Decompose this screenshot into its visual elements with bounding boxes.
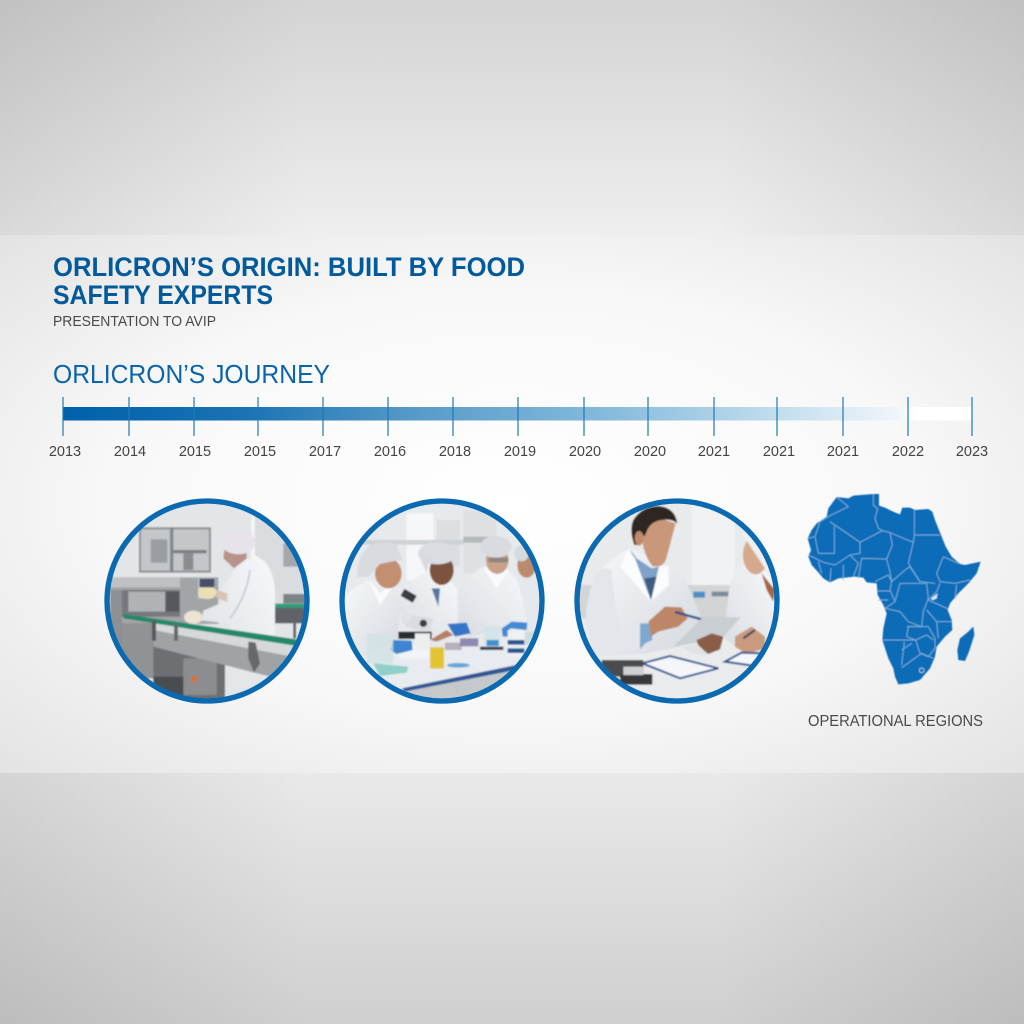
photo ring xyxy=(577,501,777,701)
photo ring xyxy=(107,501,307,701)
person xyxy=(202,556,276,636)
photo ring xyxy=(342,501,542,701)
timeline year labels: 2023 xyxy=(956,444,988,460)
timeline year labels xyxy=(49,444,988,460)
person 1 xyxy=(346,582,398,640)
country borders xyxy=(808,494,970,668)
shirt and tie area xyxy=(630,549,659,600)
timeline year labels: 2021 xyxy=(698,444,730,460)
lab device xyxy=(602,660,643,677)
Africa silhouette xyxy=(808,494,981,684)
upper frame xyxy=(140,528,210,572)
timeline year labels: 2020 xyxy=(634,444,666,460)
tablet xyxy=(673,617,741,647)
timeline year labels: 2021 xyxy=(827,444,859,460)
cuff and hand xyxy=(640,623,652,649)
bench xyxy=(377,637,530,690)
timeline ticks xyxy=(63,397,972,436)
machine xyxy=(110,577,218,624)
photo: packaging line worker xyxy=(103,497,313,707)
timeline year labels: 2020 xyxy=(569,444,601,460)
person 3 xyxy=(458,567,527,637)
title: ORLICRON’S ORIGIN: BUILT BY FOOD xyxy=(53,252,525,282)
map: Africa operational regions xyxy=(808,494,981,684)
right person xyxy=(724,570,773,646)
man coat xyxy=(605,552,700,653)
person far right xyxy=(517,568,543,640)
clipboard xyxy=(642,656,718,678)
gloves xyxy=(390,640,413,654)
table xyxy=(595,643,778,710)
background: bottom band xyxy=(0,773,1024,1024)
section heading: journey: ORLICRON’S JOURNEY xyxy=(53,359,330,389)
microscope xyxy=(399,646,429,658)
title xyxy=(53,252,525,310)
glassware xyxy=(367,633,393,663)
timeline xyxy=(49,397,988,460)
timeline year labels: 2015 xyxy=(179,444,211,460)
person 2 xyxy=(402,576,457,624)
timeline year labels: 2016 xyxy=(374,444,406,460)
lake and Lesotho xyxy=(931,593,938,600)
head xyxy=(642,517,676,567)
background: top band xyxy=(0,0,1024,235)
timeline bar xyxy=(63,407,972,420)
photo: lab technicians xyxy=(337,497,550,710)
photo: scientists with tablet xyxy=(572,497,785,710)
timeline year labels: 2019 xyxy=(504,444,536,460)
timeline year labels: 2018 xyxy=(439,444,471,460)
timeline year labels: 2013 xyxy=(49,444,81,460)
title: SAFETY EXPERTS xyxy=(53,280,273,310)
timeline year labels: 2017 xyxy=(309,444,341,460)
timeline year labels: 2014 xyxy=(114,444,146,460)
timeline year labels: 2021 xyxy=(763,444,795,460)
panel: main content band xyxy=(0,235,1024,773)
Madagascar xyxy=(957,627,974,661)
map label: OPERATIONAL REGIONS xyxy=(808,713,983,730)
subtitle: PRESENTATION TO AVIP xyxy=(53,313,216,330)
timeline year labels: 2015 xyxy=(244,444,276,460)
right table xyxy=(275,605,307,623)
conveyor xyxy=(152,630,288,677)
timeline year labels: 2022 xyxy=(892,444,924,460)
